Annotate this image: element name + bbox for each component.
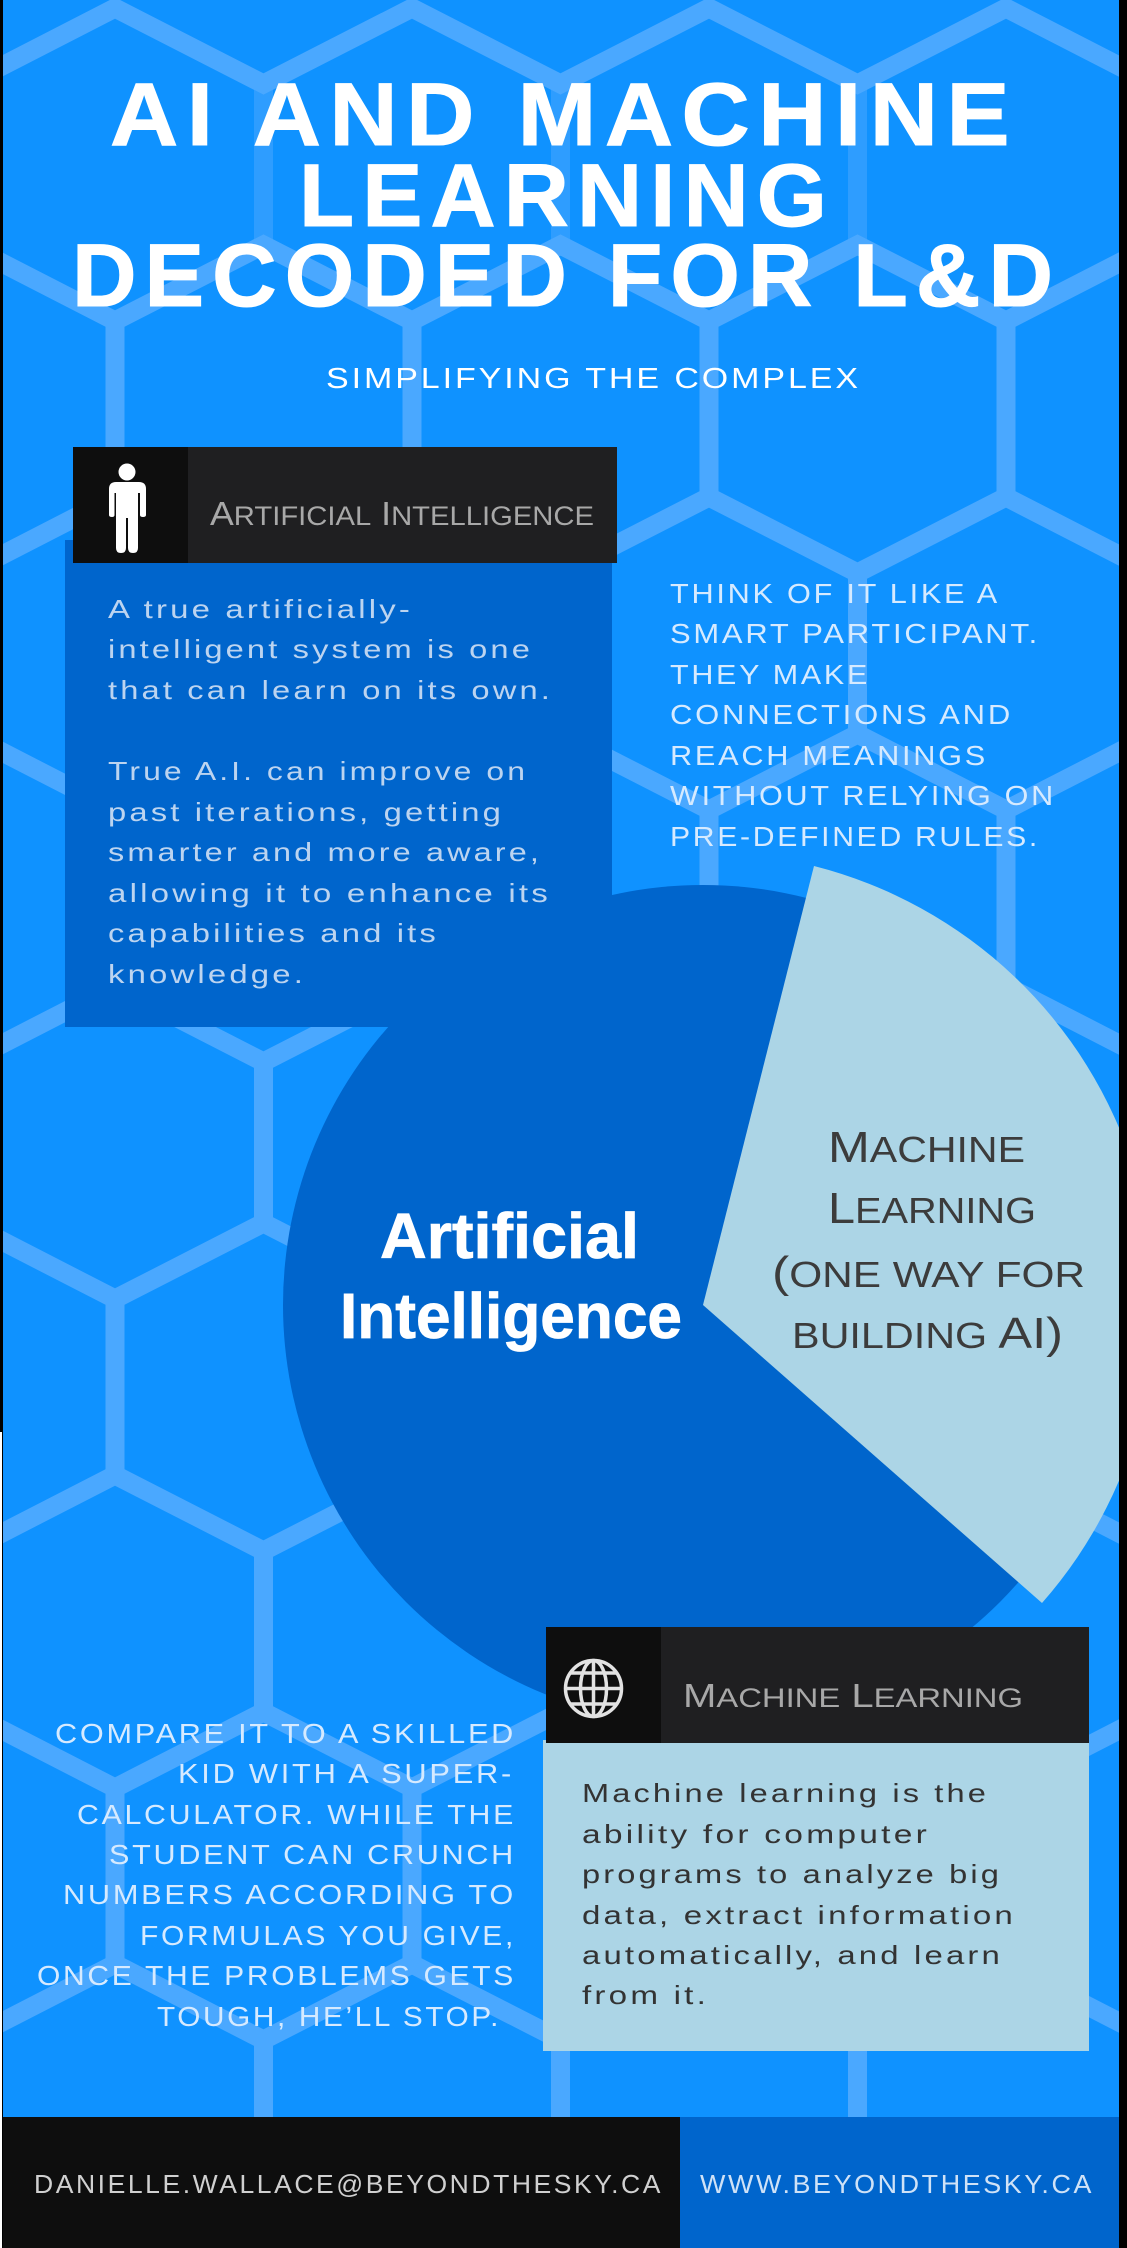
definition text: programs to analyze big bbox=[582, 1859, 1002, 1889]
title bbox=[77, 82, 1050, 308]
definition text: data, extract information bbox=[582, 1900, 1016, 1930]
wedge label bbox=[772, 1123, 1085, 1358]
analogy text: smart participant: THEY MAKE bbox=[670, 659, 870, 690]
definition text: from it. bbox=[582, 1980, 709, 2010]
analogy text: smart participant: WITHOUT RELYING ON bbox=[670, 780, 1056, 811]
analogy text: smart participant: REACH MEANINGS bbox=[670, 740, 988, 771]
icon: globe bbox=[566, 1660, 622, 1716]
definition text: ability for computer bbox=[582, 1819, 930, 1849]
analogy text: skilled kid bbox=[37, 1718, 516, 2032]
panel: artificial intelligence definition bbox=[65, 447, 617, 1027]
definition text bbox=[582, 1778, 1016, 2010]
definition text: True A.I. can improve on bbox=[108, 756, 528, 786]
footer: email bbox=[3, 2117, 680, 2248]
header label: MACHINE LEARNING bbox=[683, 1677, 1023, 1714]
definition text: past iterations, getting bbox=[108, 797, 504, 827]
definition text: automatically, and learn bbox=[582, 1940, 1003, 1970]
analogy text: skilled kid: TOUGH, HE’LL STOP. bbox=[157, 2001, 501, 2032]
analogy text: smart participant: SMART PARTICIPANT. bbox=[670, 618, 1040, 649]
definition text: allowing it to enhance its bbox=[108, 878, 551, 908]
circle: artificial intelligence bbox=[283, 885, 1018, 1694]
definition text: intelligent system is one bbox=[108, 634, 533, 664]
footer: email: DANIELLE.WALLACE@BEYONDTHESKY.CA bbox=[34, 2169, 663, 2199]
definition text: smarter and more aware, bbox=[108, 837, 542, 867]
definition text: Machine learning is the bbox=[582, 1778, 989, 1808]
title: LEARNING bbox=[299, 145, 835, 245]
circle label: artificial intelligence: Intelligence bbox=[340, 1280, 682, 1352]
circle label: artificial intelligence bbox=[340, 1200, 682, 1352]
definition text: knowledge. bbox=[108, 959, 306, 989]
analogy text: skilled kid: FORMULAS YOU GIVE, bbox=[140, 1920, 516, 1951]
footer: website bbox=[680, 2117, 1119, 2248]
analogy text: smart participant bbox=[670, 578, 1056, 852]
footer: website: WWW.BEYONDTHESKY.CA bbox=[700, 2169, 1094, 2199]
title: AI AND MACHINE bbox=[110, 64, 1018, 164]
analogy text: smart participant: CONNECTIONS AND bbox=[670, 699, 1013, 730]
icon: person bbox=[109, 464, 146, 553]
title: DECODED FOR L&D bbox=[72, 225, 1061, 325]
circle label: artificial intelligence: Artificial bbox=[380, 1200, 639, 1272]
panel header: artificial intelligence bbox=[73, 447, 617, 563]
wedge label: LEARNING bbox=[828, 1184, 1036, 1233]
analogy text: skilled kid: KID WITH A SUPER- bbox=[178, 1758, 514, 1789]
definition text: that can learn on its own. bbox=[108, 675, 553, 705]
analogy text: smart participant: PRE-DEFINED RULES. bbox=[670, 821, 1040, 852]
definition text: capabilities and its bbox=[108, 918, 439, 948]
analogy text: skilled kid: ONCE THE PROBLEMS GETS bbox=[37, 1960, 516, 1991]
header label: ARTIFICIAL INTELLIGENCE bbox=[210, 495, 594, 532]
analogy text: skilled kid: COMPARE IT TO A SKILLED bbox=[55, 1718, 516, 1749]
wedge label: MACHINE bbox=[828, 1123, 1025, 1172]
analogy text: skilled kid: CALCULATOR. WHILE THE bbox=[77, 1799, 516, 1830]
subtitle: SIMPLIFYING THE COMPLEX bbox=[326, 363, 861, 395]
definition text: A true artificially- bbox=[108, 594, 413, 624]
panel: machine learning definition bbox=[543, 1627, 1089, 2051]
wedge label: (ONE WAY FOR bbox=[772, 1248, 1085, 1297]
analogy text: skilled kid: NUMBERS ACCORDING TO bbox=[63, 1879, 516, 1910]
pie wedge: machine learning bbox=[703, 866, 1127, 1603]
analogy text: smart participant: THINK OF IT LIKE A bbox=[670, 578, 1000, 609]
wedge label: BUILDING AI) bbox=[792, 1309, 1063, 1358]
panel header: machine learning bbox=[546, 1627, 1089, 1743]
analogy text: skilled kid: STUDENT CAN CRUNCH bbox=[109, 1839, 516, 1870]
definition text bbox=[108, 594, 553, 989]
